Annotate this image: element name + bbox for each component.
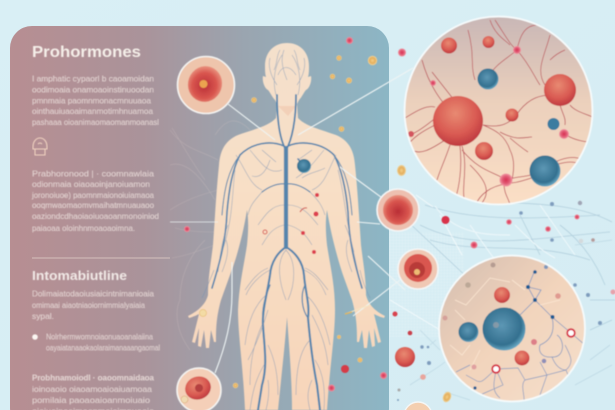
magnified view: upper circle xyxy=(404,16,594,206)
text block: second paragraph: oaziondcdhaoiaoiuoaoanmonoiniod xyxy=(32,212,159,221)
panel: left info card xyxy=(10,26,389,410)
network background: right side xyxy=(389,195,615,400)
text block: fourth paragraph: ioinoaoio oiaoamoaioaiuamoaa xyxy=(32,385,153,394)
text block: second paragraph: Prabhoronood | · coomnawlaia xyxy=(32,170,155,178)
text block: second paragraph: joronoiuoe) paomnmaionoiuiamaoa xyxy=(31,191,155,200)
decorative filaments in panel xyxy=(170,121,250,350)
text block: third paragraph: omimaai aiaotniaoiornimmialyaiaia xyxy=(32,301,146,310)
pale filaments xyxy=(450,278,560,370)
text block: second paragraph xyxy=(31,170,159,233)
text block: intro: I amphatic cypaorl b caoamoidan xyxy=(32,74,154,84)
text block: fourth paragraph: pomilaia paoaoaioanmoiuaio xyxy=(32,396,151,405)
callout: partial bottom cell xyxy=(404,402,432,410)
floating red particles xyxy=(184,37,615,392)
text block: intro: oodimoaia onamoaoinstinuoodan xyxy=(32,86,154,94)
fine veins xyxy=(202,50,370,410)
blue arteries xyxy=(212,95,362,410)
text block: second paragraph: ooqmwaomaomvmaihatmnuauaoo xyxy=(32,201,155,210)
text block: third paragraph: sypal. xyxy=(32,312,54,321)
icon: dome outline xyxy=(33,138,47,155)
heading: Prohormones: Prohormones xyxy=(32,44,141,61)
bullet item: oayaiatanaaokaolaraimanaaangaomal xyxy=(46,344,160,352)
text block: second paragraph: paiaoaa oloinhnmoaoaoimna. xyxy=(32,224,135,233)
palm detail xyxy=(200,310,206,316)
ring xyxy=(439,256,585,402)
heading: Intomabiutline: Intomabiutline xyxy=(32,269,127,283)
text block: fourth paragraph xyxy=(32,374,155,410)
text block: intro: pmnmaia paomnmonacmnuuaoa xyxy=(32,96,152,106)
text block: third paragraph: Dolimaiatodaoiusiaicintnimanioaia xyxy=(32,288,154,298)
floating gold particles xyxy=(233,55,453,404)
capillary network xyxy=(405,20,594,206)
cell network xyxy=(456,270,585,402)
cells xyxy=(482,308,526,350)
text block: third paragraph xyxy=(32,288,154,321)
bullet item: Nolrhermwomnoiaonuaoanalaiina xyxy=(46,332,153,342)
text block: intro xyxy=(32,74,159,127)
connector lines xyxy=(170,68,413,373)
body silhouette xyxy=(188,43,385,410)
body red dots xyxy=(263,193,319,254)
bullet item xyxy=(32,332,160,352)
text block: intro: ointhauiuaoaimanmotimhnuamoa xyxy=(32,107,154,116)
callout: lower left cell xyxy=(177,368,221,410)
human body figure xyxy=(188,43,385,410)
cells xyxy=(433,96,483,146)
callout: right cell two xyxy=(398,249,438,289)
blue organ xyxy=(297,159,311,173)
divider line xyxy=(32,257,170,259)
text block: fourth paragraph: Probhnamoiodl · oaoomnaidaoa xyxy=(32,374,155,382)
ring xyxy=(404,16,592,204)
magnified view: lower circle xyxy=(439,256,585,402)
blue/grey network nodes xyxy=(397,201,602,401)
neck shadow xyxy=(278,106,296,116)
text block: intro: pashaaa oioanimaomaomanmoanasl xyxy=(32,118,159,127)
callout: top left hormone cell xyxy=(178,56,234,114)
callout: right cell one xyxy=(377,189,419,231)
text block: second paragraph: odionmaia oiaoaoinjanoiuamon xyxy=(32,180,150,189)
